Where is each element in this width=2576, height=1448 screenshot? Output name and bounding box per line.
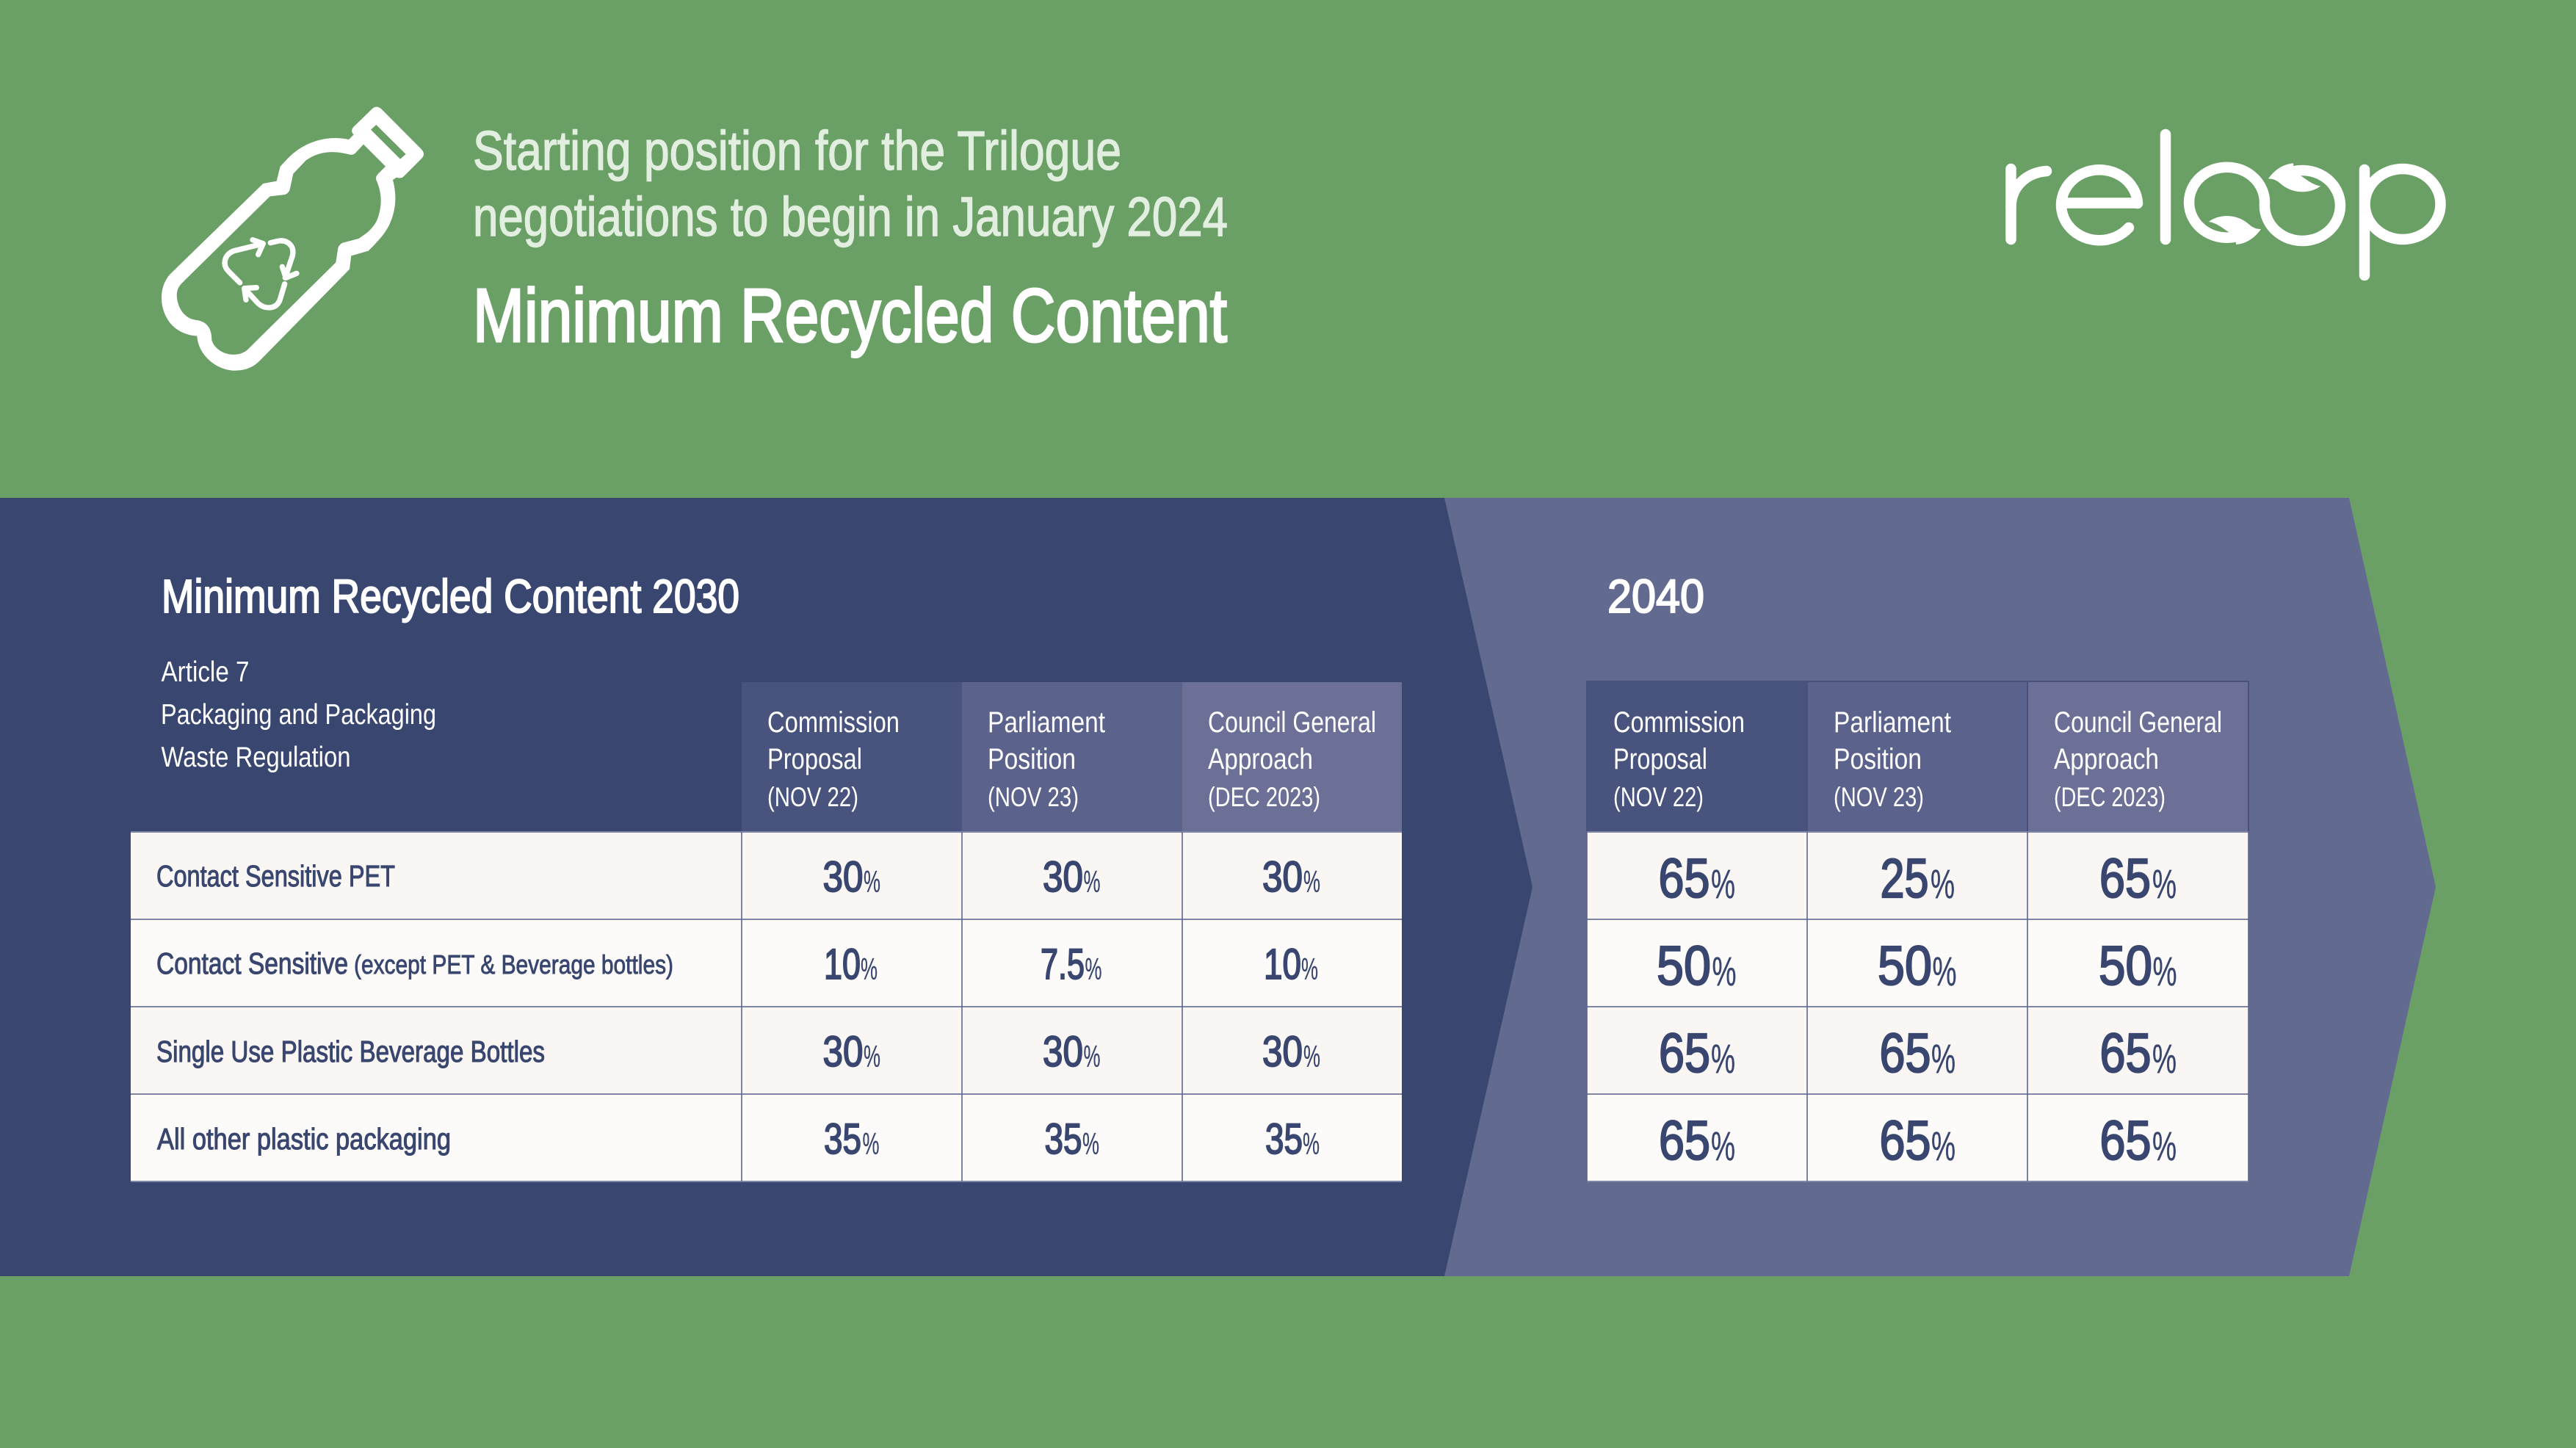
- row: All other plastic packaging: All other plastic packaging: [157, 1122, 451, 1156]
- row: Contact Sensitive except PET and Beverage bottles: [156, 941, 1318, 988]
- row values: Contact Sensitive PET 2040: %: [1931, 861, 1955, 907]
- header cell: Parliament Position: Parliament: [1834, 706, 1951, 739]
- row: Contact Sensitive PET: 30: [822, 853, 864, 901]
- row values: Beverage Bottles 2040: 65: [2100, 1022, 2152, 1084]
- row: Contact Sensitive PET: 30: [1262, 853, 1303, 901]
- row: All other plastic packaging: 35: [824, 1115, 861, 1163]
- row: Single Use Plastic Beverage Bottles: [156, 1028, 1320, 1076]
- header cell: Commission Proposal: [1587, 681, 1807, 832]
- text block: Article 7 Packaging and Packaging Waste Regulation: Article 7: [162, 656, 250, 688]
- row values: Contact Sensitive PET 2040: 25: [1880, 847, 1928, 909]
- row: Single Use Plastic Beverage Bottles: %: [864, 1039, 880, 1074]
- panel: 2030 arrow: [0, 498, 1533, 1276]
- row: Contact Sensitive except PET and Beverage bottles: 10: [824, 941, 861, 988]
- header cell: Commission Proposal: Commission: [1613, 706, 1745, 739]
- panel: 2040 arrow: [1395, 498, 2436, 1276]
- row: All other plastic packaging: %: [862, 1126, 880, 1161]
- row values: All other plastic packaging 2040: 65: [1880, 1109, 1931, 1171]
- header cell: Commission Proposal: [742, 682, 962, 832]
- row values: All other plastic packaging 2040: [1659, 1109, 2177, 1171]
- row values: All other plastic packaging 2040: 65: [2100, 1109, 2152, 1171]
- row: Single Use Plastic Beverage Bottles: %: [1303, 1039, 1320, 1074]
- row values: Beverage Bottles 2040: 65: [1880, 1022, 1931, 1084]
- subtitle line 2: negotiations to begin in January 2024: [473, 186, 1228, 247]
- heading: 2040: 2040: [1607, 570, 1704, 623]
- row values: All other plastic packaging 2040: 65: [1659, 1109, 1710, 1171]
- row: All other plastic packaging: %: [1082, 1126, 1099, 1161]
- header cell: Commission Proposal: (NOV 22): [1613, 782, 1704, 812]
- row: Contact Sensitive PET: %: [1303, 864, 1320, 899]
- row: Contact Sensitive PET: [156, 853, 1320, 901]
- row values: Contact Sensitive other 2040: 50: [1657, 935, 1711, 996]
- row values: Contact Sensitive other 2040: [1657, 935, 2177, 996]
- icon: plastic bottle with recycling arrows: [162, 106, 424, 371]
- row: Contact Sensitive except PET and Beverage bottles: %: [861, 952, 878, 986]
- header cell: Parliament Position: (NOV 23): [988, 782, 1079, 812]
- header cell: Parliament Position: Position: [1834, 743, 1922, 775]
- text block: Article 7 Packaging and Packaging Waste Regulation: Waste Regulation: [162, 742, 351, 773]
- header cell: Commission Proposal: Proposal: [1613, 743, 1707, 775]
- row: Single Use Plastic Beverage Bottles: 30: [822, 1028, 864, 1076]
- header cell: Commission Proposal: Commission: [767, 706, 900, 739]
- header cell: Commission Proposal: Proposal: [767, 743, 862, 775]
- title block: [473, 120, 1228, 358]
- row: Contact Sensitive except PET and Beverage bottles: %: [1301, 952, 1318, 986]
- row: Single Use Plastic Beverage Bottles: Single Use Plastic Beverage Bottles: [156, 1035, 545, 1068]
- row: Contact Sensitive PET: %: [864, 864, 880, 899]
- header cell: Parliament Position: Parliament: [988, 706, 1105, 739]
- heading: Minimum Recycled Content 2030: Minimum Recycled Content 2030: [162, 570, 739, 623]
- row values: Contact Sensitive other 2040: 50: [1878, 935, 1932, 996]
- header cell: Parliament Position: [962, 682, 1182, 832]
- table body grid: [1587, 832, 2248, 1181]
- row: Single Use Plastic Beverage Bottles: %: [1084, 1039, 1100, 1074]
- header cell: Parliament Position: [1807, 681, 2027, 832]
- row values: Beverage Bottles 2040: 65: [1659, 1022, 1710, 1084]
- row values: Contact Sensitive PET 2040: %: [2152, 861, 2177, 907]
- row: Contact Sensitive except PET and Beverage bottles: 7.5: [1041, 941, 1085, 988]
- header cell: Council General Approach: Approach: [1208, 743, 1313, 775]
- row values: All other plastic packaging 2040: %: [2152, 1123, 2177, 1169]
- row: Contact Sensitive except PET and Beverage bottles: Contact Sensitive: [156, 946, 348, 980]
- row: Contact Sensitive except PET and Beverage bottles: (except PET & Beverage bottles): [354, 949, 673, 980]
- table body grid: [131, 832, 1402, 1181]
- row: Single Use Plastic Beverage Bottles: 30: [1043, 1028, 1083, 1076]
- row values: Beverage Bottles 2040: %: [1711, 1035, 1735, 1082]
- header cell: Council General Approach: (DEC 2023): [1208, 782, 1320, 812]
- header cell: Parliament Position: Position: [988, 743, 1076, 775]
- row: Contact Sensitive PET: Contact Sensitive PET: [156, 859, 395, 893]
- table: 2040 targets: [1587, 681, 2248, 1181]
- row values: Contact Sensitive other 2040: 50: [2099, 935, 2152, 996]
- row values: Contact Sensitive PET 2040: [1658, 847, 2177, 909]
- row values: Contact Sensitive other 2040: %: [1933, 948, 1956, 994]
- header cell: Council General Approach: Council General: [2054, 706, 2222, 739]
- row: All other plastic packaging: 35: [1044, 1115, 1082, 1163]
- row: All other plastic packaging: %: [1303, 1126, 1320, 1161]
- text block: Article 7 Packaging and Packaging Waste Regulation: [161, 656, 436, 773]
- logo: reloop: [2011, 134, 2441, 275]
- header cell: Council General Approach: Approach: [2054, 743, 2159, 775]
- row values: All other plastic packaging 2040: %: [1711, 1123, 1735, 1169]
- header cell: Commission Proposal: (NOV 22): [767, 782, 858, 812]
- text block: Article 7 Packaging and Packaging Waste Regulation: Packaging and Packaging: [161, 699, 436, 731]
- row: Contact Sensitive except PET and Beverage bottles: %: [1085, 952, 1101, 986]
- header cell: Council General Approach: [2027, 681, 2248, 832]
- row values: Beverage Bottles 2040: [1659, 1022, 2177, 1084]
- header cell: Council General Approach: (DEC 2023): [2054, 782, 2166, 812]
- row values: All other plastic packaging 2040: %: [1931, 1123, 1955, 1169]
- header cell: Council General Approach: [1182, 682, 1402, 832]
- row: Single Use Plastic Beverage Bottles: 30: [1262, 1028, 1303, 1076]
- row values: Contact Sensitive PET 2040: %: [1711, 861, 1735, 907]
- row values: Contact Sensitive PET 2040: 65: [2099, 847, 2151, 909]
- row values: Contact Sensitive other 2040: %: [2153, 948, 2177, 994]
- row: Contact Sensitive PET: %: [1084, 864, 1100, 899]
- row: All other plastic packaging: [157, 1115, 1320, 1163]
- row values: Contact Sensitive PET 2040: 65: [1658, 847, 1710, 909]
- row values: Beverage Bottles 2040: %: [2152, 1035, 2177, 1082]
- main title: Minimum Recycled Content: [473, 273, 1227, 358]
- row: Contact Sensitive except PET and Beverage bottles: 10: [1264, 941, 1301, 988]
- header cell: Council General Approach: Council General: [1208, 706, 1376, 739]
- row values: Beverage Bottles 2040: %: [1931, 1035, 1955, 1082]
- row: All other plastic packaging: 35: [1265, 1115, 1303, 1163]
- row values: Contact Sensitive other 2040: %: [1712, 948, 1736, 994]
- header cell: Parliament Position: (NOV 23): [1834, 782, 1924, 812]
- table: 2030 targets: [131, 682, 1402, 1181]
- subtitle line 1: Starting position for the Trilogue: [473, 120, 1121, 181]
- row: Contact Sensitive PET: 30: [1043, 853, 1083, 901]
